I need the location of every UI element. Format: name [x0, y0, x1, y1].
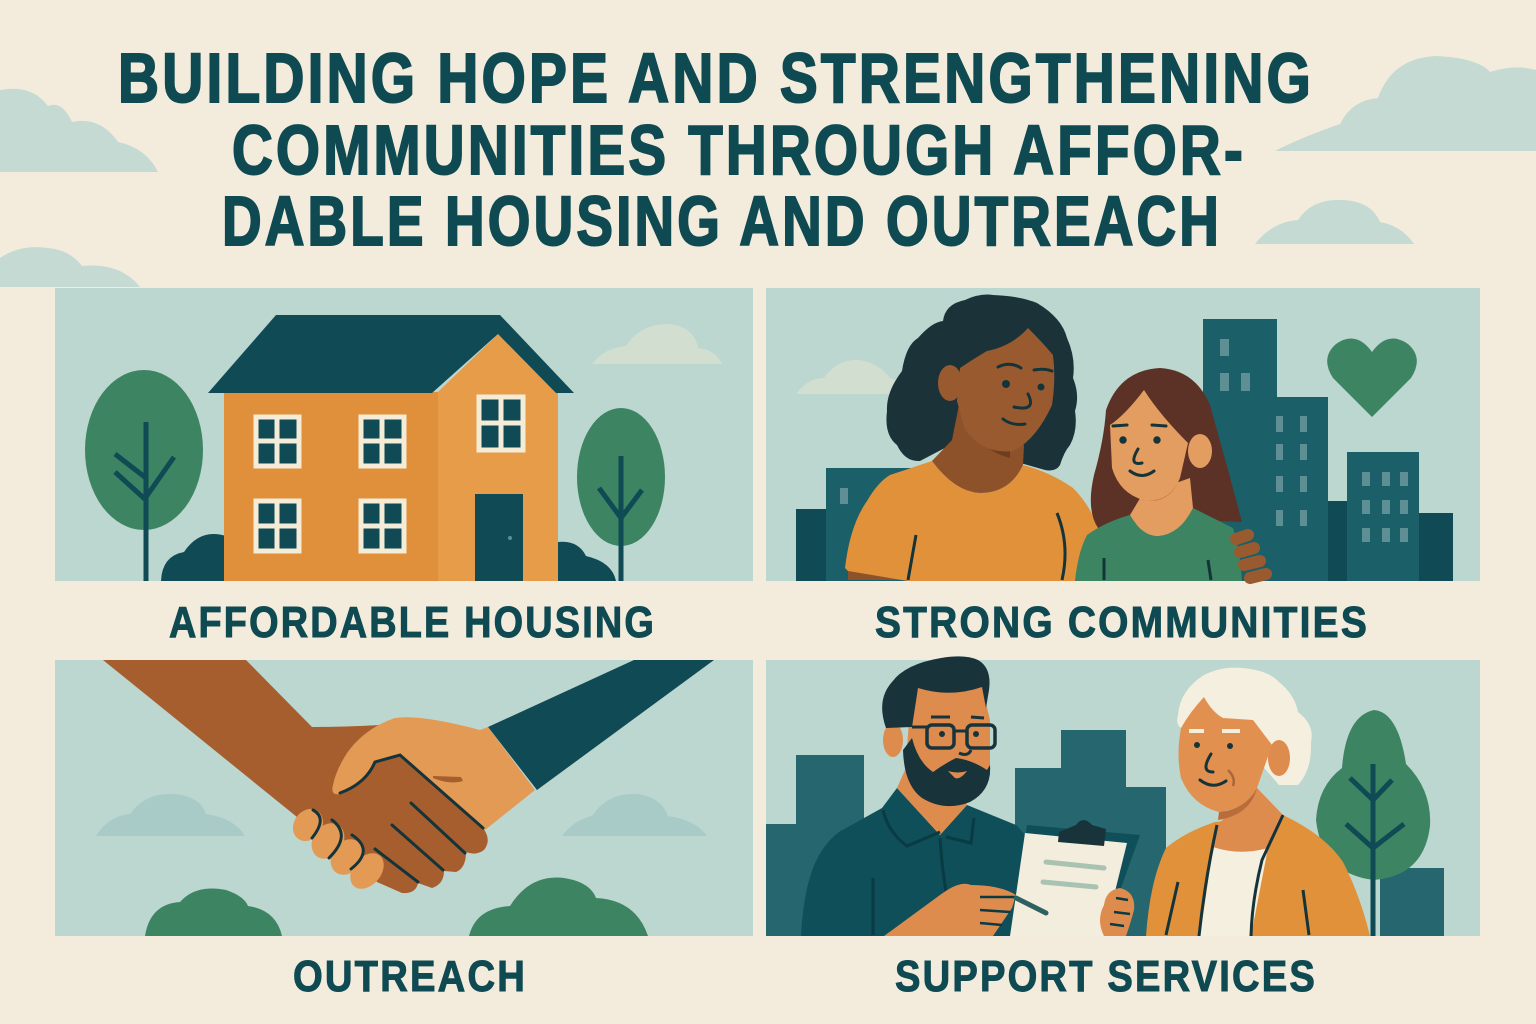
icon: cloud	[592, 324, 722, 364]
icon: tree	[1316, 710, 1430, 936]
panel: strong communities	[766, 288, 1480, 581]
panel: affordable housing	[55, 288, 753, 581]
label: outreach: OUTREACH	[293, 952, 527, 1001]
title: COMMUNITIES THROUGH AFFOR-	[232, 111, 1246, 189]
icon: house	[208, 315, 574, 581]
title: DABLE HOUSING AND OUTREACH	[222, 182, 1222, 260]
icon: handshake	[103, 660, 714, 895]
label: support services: SUPPORT SERVICES	[895, 952, 1317, 1001]
label: affordable housing: AFFORDABLE HOUSING	[169, 598, 656, 647]
icon: clipboard	[884, 820, 1140, 936]
icon: city	[766, 730, 1444, 936]
figure: woman	[1146, 668, 1370, 936]
icon: cloud	[796, 360, 906, 394]
title	[118, 39, 1314, 260]
icon: left tree	[85, 370, 203, 581]
figure: girl	[1075, 368, 1266, 581]
icon: bushes	[161, 534, 616, 581]
figure: man	[801, 656, 1030, 936]
icon: heart	[1327, 339, 1417, 417]
label: strong communities: STRONG COMMUNITIES	[875, 598, 1369, 647]
icon: city	[796, 319, 1453, 581]
panel: outreach	[55, 660, 753, 936]
icon: bushes	[145, 878, 648, 936]
background clouds	[0, 56, 1536, 287]
icon: right tree	[577, 408, 665, 581]
icon: clouds	[96, 794, 707, 836]
figure: woman	[845, 295, 1098, 581]
panel: support services	[766, 656, 1480, 936]
